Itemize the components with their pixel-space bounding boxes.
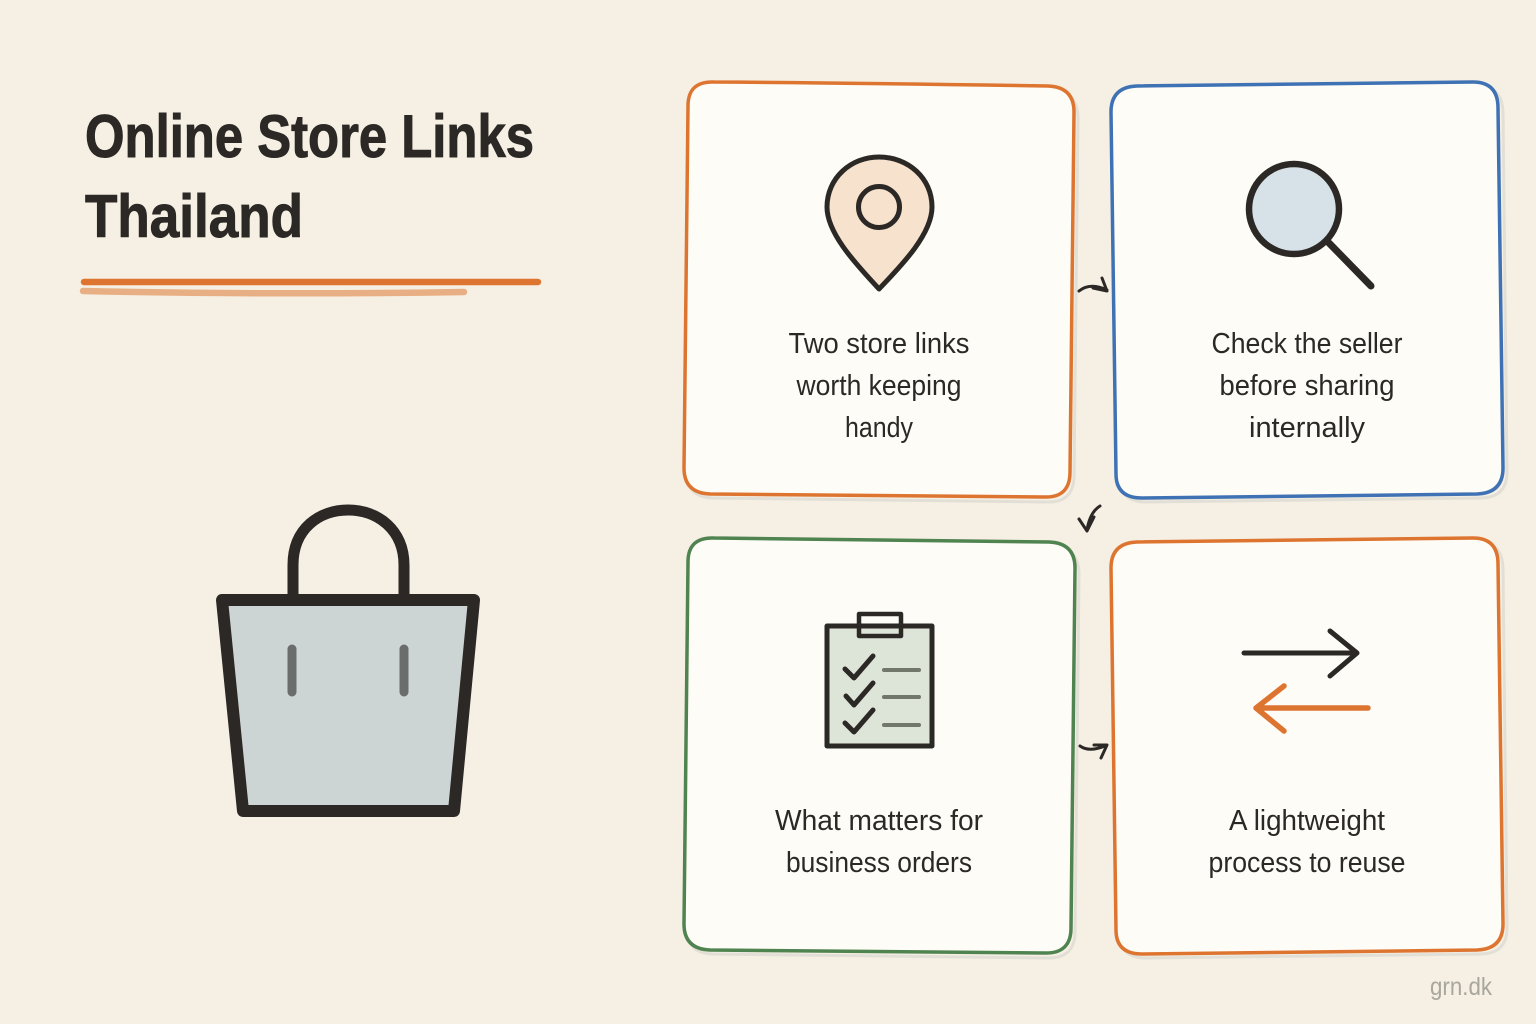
card text: worth keeping xyxy=(796,370,962,402)
watermark: grn.dk xyxy=(1430,973,1492,1001)
card text xyxy=(788,328,970,444)
icon: magnifying glass xyxy=(1249,164,1371,286)
card text: Two store links xyxy=(788,328,970,360)
card text: process to reuse xyxy=(1208,847,1406,879)
panel: business orders xyxy=(684,538,1079,958)
icon: location pin xyxy=(827,157,932,289)
card text xyxy=(775,805,983,879)
arrow: card three to four xyxy=(1080,745,1107,758)
card text: What matters for xyxy=(775,805,983,837)
card text xyxy=(1208,805,1406,879)
card text: Check the seller xyxy=(1212,328,1403,360)
card text: A lightweight xyxy=(1229,805,1385,837)
title underline xyxy=(83,282,538,293)
card text: handy xyxy=(845,412,913,444)
panel: lightweight process xyxy=(1111,538,1507,958)
panel: check the seller xyxy=(1111,82,1507,502)
card text: before sharing xyxy=(1220,370,1394,402)
icon: shopping bag xyxy=(222,510,474,811)
title: Online Store Links xyxy=(85,103,534,170)
arrow: card two to three xyxy=(1079,506,1100,531)
title: Thailand xyxy=(85,183,303,250)
icon: clipboard checklist xyxy=(827,614,932,746)
card text: internally xyxy=(1249,412,1365,444)
title xyxy=(85,103,534,250)
panel: store links xyxy=(684,82,1078,502)
card text: business orders xyxy=(786,847,972,879)
icon: exchange arrows xyxy=(1244,631,1368,731)
card text xyxy=(1212,328,1403,444)
arrow: card one to two xyxy=(1079,278,1107,291)
